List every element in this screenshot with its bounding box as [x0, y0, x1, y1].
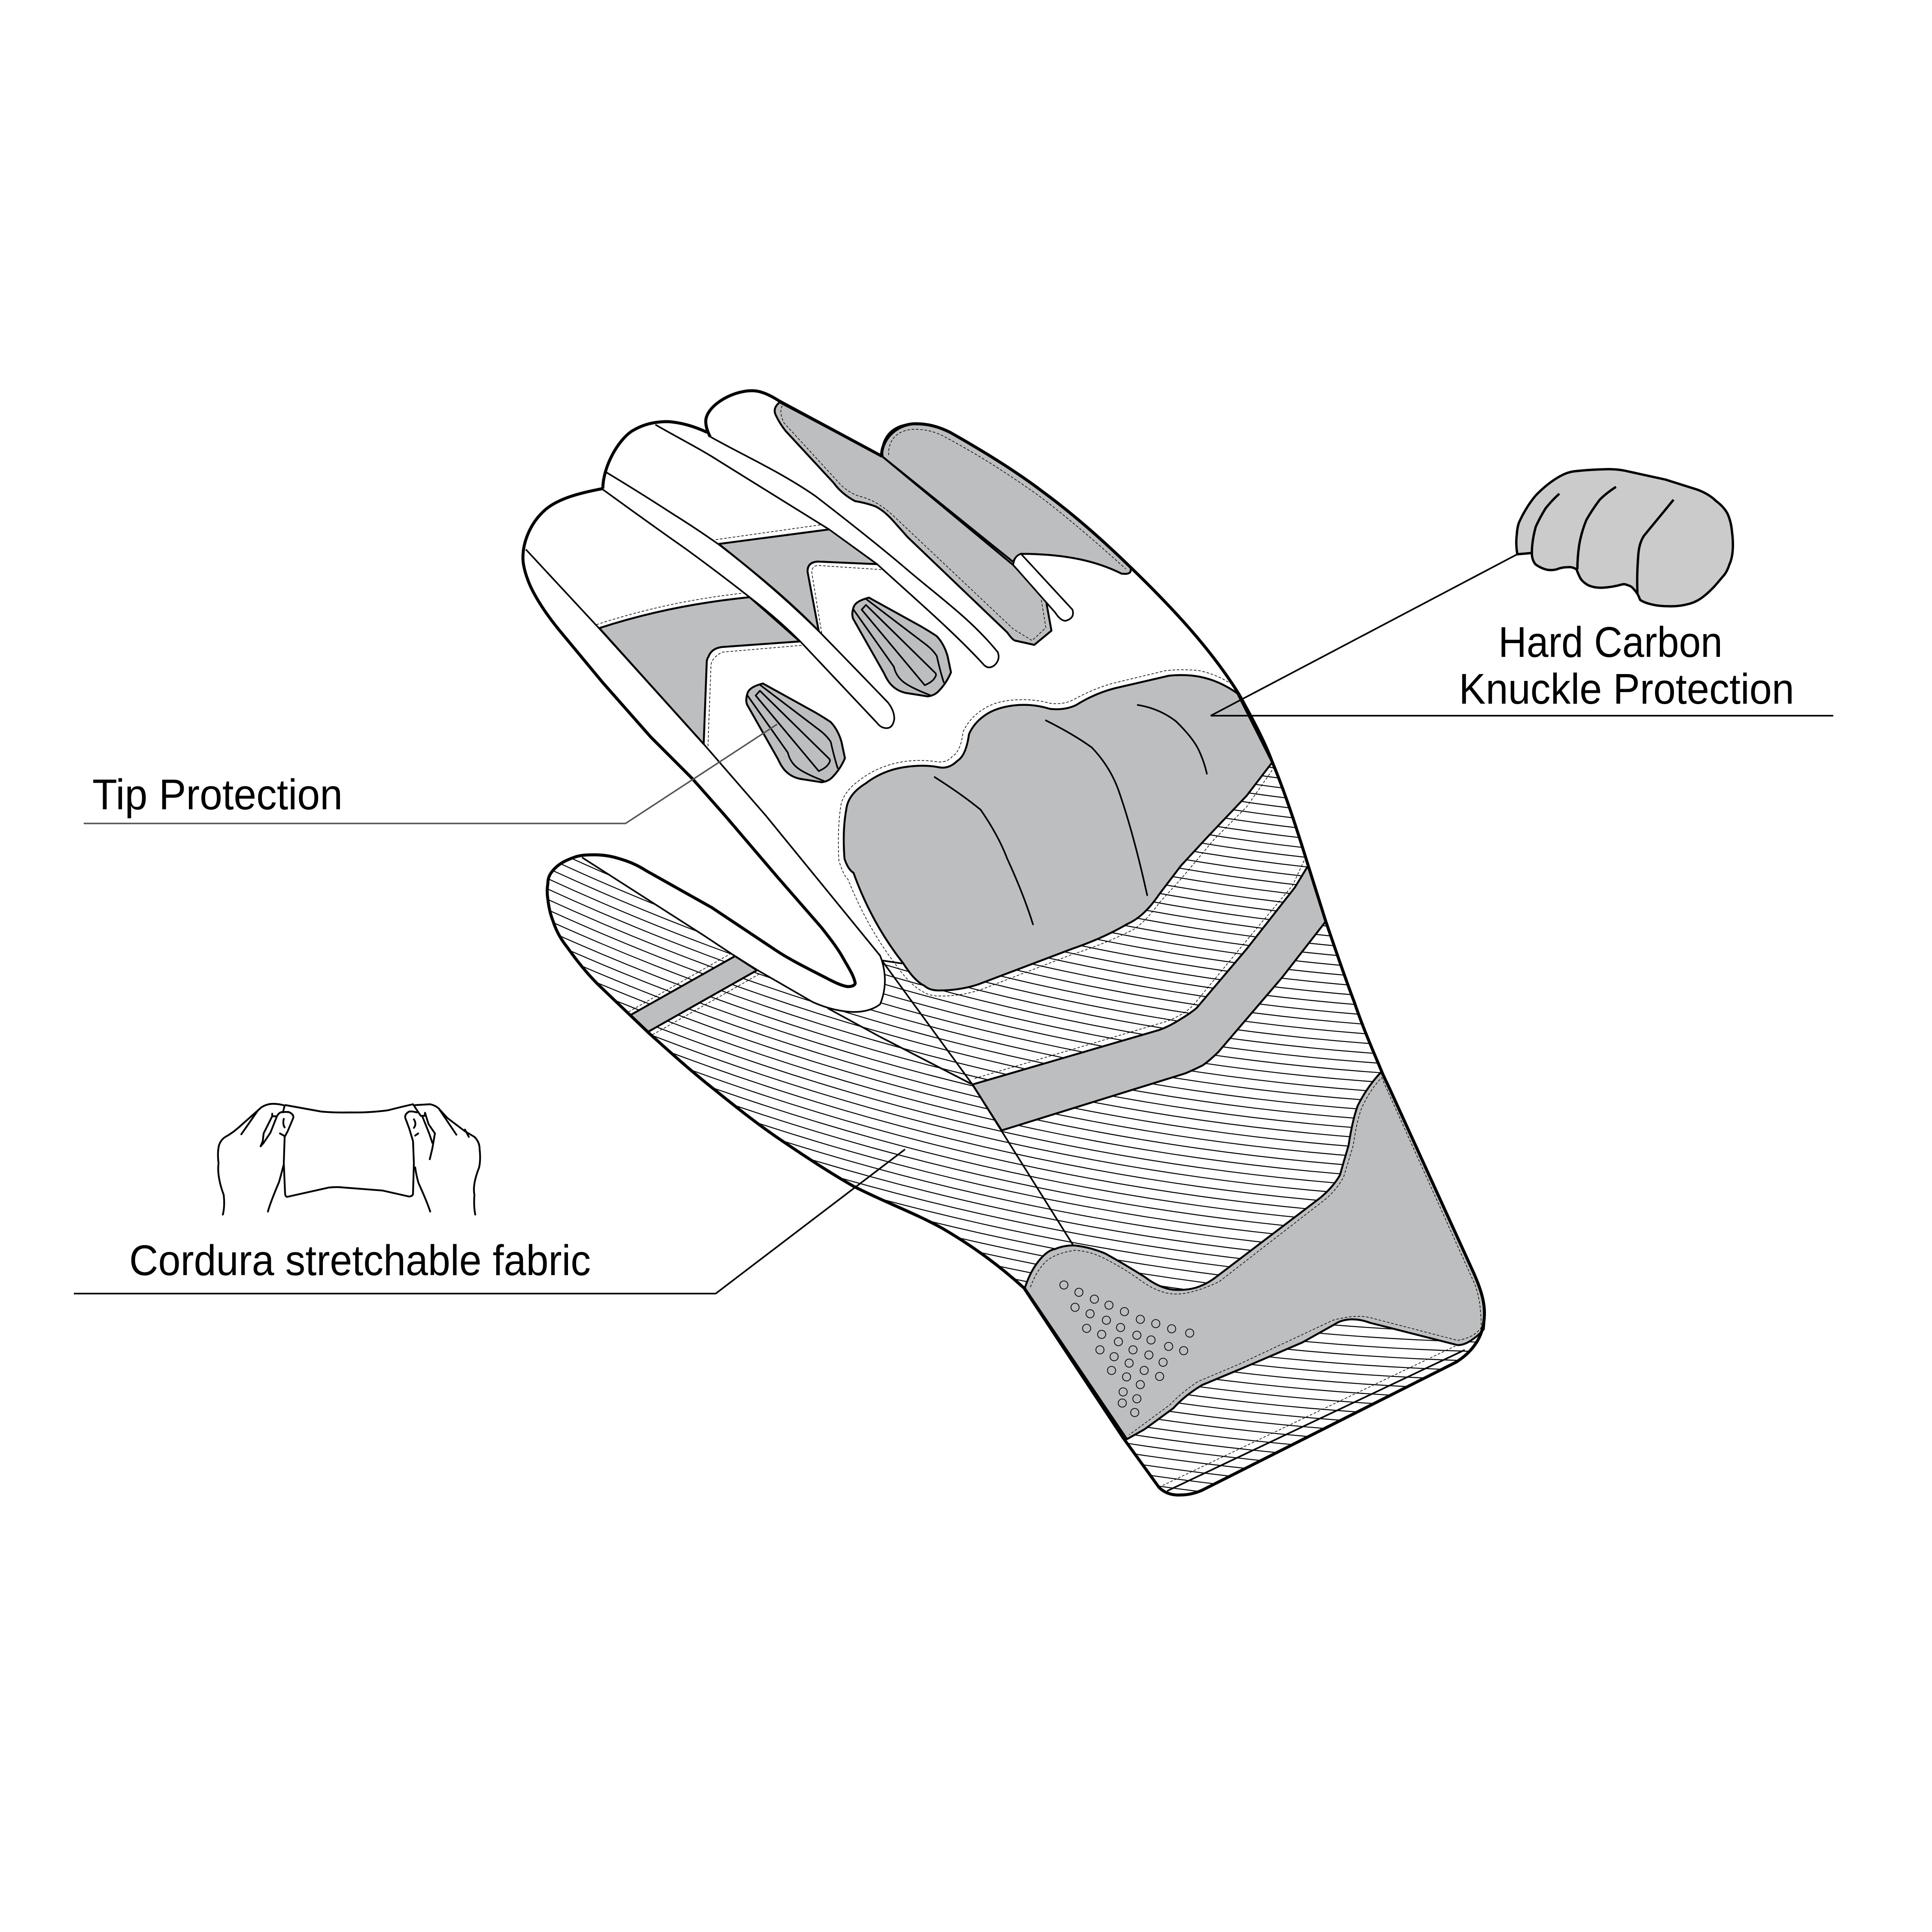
ventilation perforations: [1060, 1281, 1194, 1417]
knuckle stitching: [838, 670, 1274, 996]
heading: Hard Carbon Knuckle Protection: Hard Carbon: [1498, 618, 1722, 666]
panel: ring finger grey patch: [719, 529, 877, 631]
leader: cordura fabric: [74, 1149, 905, 1294]
finger protector pad two: [852, 598, 951, 696]
wrist stitching: [1030, 1078, 1481, 1435]
panel: side finger grey strip: [882, 424, 1131, 574]
heading: Hard Carbon Knuckle Protection: Knuckle Protection: [1459, 665, 1794, 713]
fabric hatching: [0, 0, 1932, 1522]
panel: wrist palm reinforcement: [1025, 1072, 1485, 1439]
stitching on finger patches: [596, 406, 1126, 746]
glove illustration: [521, 389, 1486, 1497]
leader: tip protection: [84, 724, 777, 823]
grey chevron band: [972, 866, 1326, 1130]
knuckle creases: [1138, 705, 1207, 774]
icon: clenched fist with hard knuckle: [1516, 469, 1733, 606]
heading: Cordura stretchable fabric: Cordura stretchable fabric: [129, 1236, 591, 1285]
heading: Hard Carbon Knuckle Protection: [1459, 618, 1794, 713]
panel: index finger grey strip: [775, 402, 1051, 645]
panel: little finger grey patch: [599, 597, 800, 744]
leader: hard carbon knuckle protection: [1211, 554, 1833, 716]
small slot in side strip: [1013, 554, 1073, 621]
seam and stitching lines over the fabric: [526, 550, 1464, 1491]
infographic canvas: [74, 389, 1833, 1497]
knuckle protection pad: [838, 670, 1274, 996]
finger band between ring and index fingers: [656, 425, 999, 668]
icon: hands stretching fabric: [218, 1104, 480, 1215]
glove outer outline: [523, 391, 1485, 1495]
heading: Tip Protection: Tip Protection: [92, 771, 343, 819]
finger protector pad one: [746, 683, 845, 782]
grey thumb band: [631, 956, 757, 1032]
finger band between little and ring fingers: [603, 472, 894, 728]
glove body fill: [523, 391, 1485, 1495]
